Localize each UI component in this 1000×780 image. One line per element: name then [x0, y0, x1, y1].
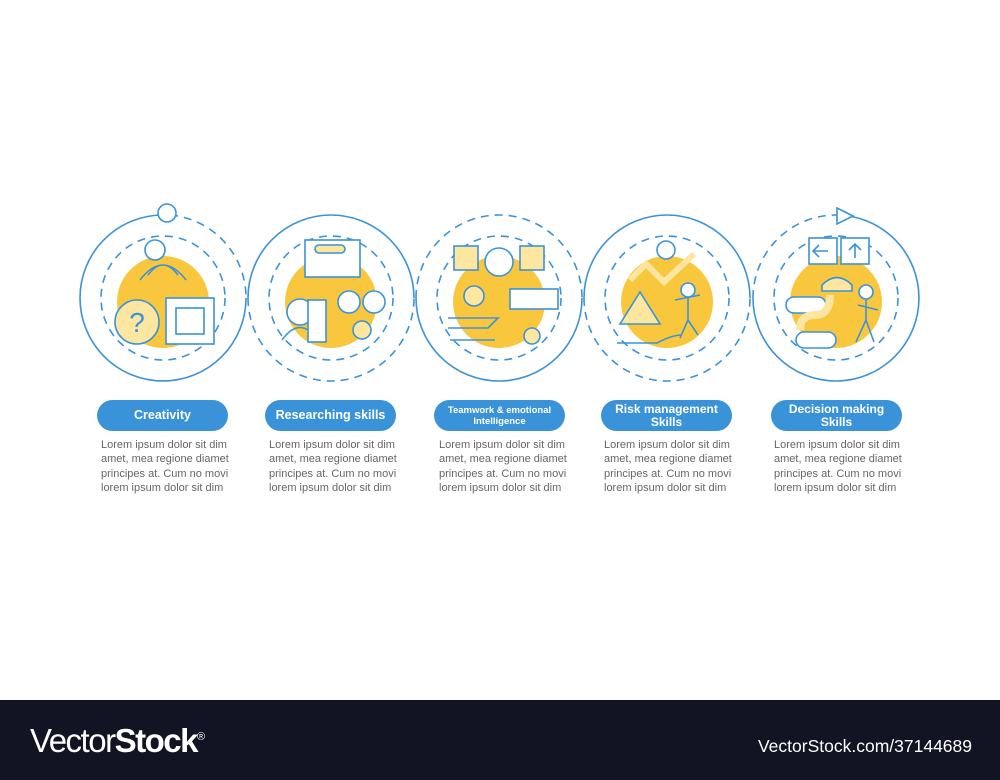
circle 5: decision: [753, 208, 919, 381]
text: creativity: Lorem ipsum dolor sit dim amet, mea regione diamet principes at. Cum no movi lorem ipsum dolor sit dim: [101, 439, 229, 494]
pill: Risk management: Skills: [651, 414, 682, 428]
logo: VectorStock®: [30, 722, 204, 759]
pill: Teamwork: Teamwork & emotional: [448, 404, 551, 416]
text: teamwork: Lorem ipsum dolor sit dim amet, mea regione diamet principes at. Cum no movi lorem ipsum dolor sit dim: [439, 439, 567, 494]
circle 4: risk: [584, 215, 750, 381]
circle 2: research: [248, 215, 414, 381]
pill: Researching skills: Researching skills: [276, 408, 385, 422]
circle 1: creativity: ?: [129, 307, 145, 338]
text: researching: Lorem ipsum dolor sit dim amet, mea regione diamet principes at. Cum no movi lorem ipsum dolor sit dim: [269, 439, 397, 494]
pill: Teamwork: [434, 400, 565, 431]
pill: Decision making: Skills: [821, 414, 852, 428]
circle 1: creativity: [80, 204, 246, 381]
pill: Risk management: [601, 400, 732, 431]
url: VectorStock.com/37144689: [758, 736, 972, 756]
pill: Risk management: Risk management: [615, 402, 718, 416]
diagram circles: [79, 203, 920, 382]
pill: Researching skills: [265, 400, 396, 431]
pill: Decision making: Decision making: [789, 402, 884, 416]
text: decision: Lorem ipsum dolor sit dim amet, mea regione diamet principes at. Cum no movi lorem ipsum dolor sit dim: [774, 439, 902, 494]
pill: Decision making: [771, 400, 902, 431]
pill: Creativity: [97, 400, 228, 431]
text: risk: Lorem ipsum dolor sit dim amet, mea regione diamet principes at. Cum no movi lorem ipsum dolor sit dim: [604, 439, 732, 494]
pill: Creativity: Creativity: [134, 408, 191, 422]
footer bar: [0, 700, 1000, 780]
circle 3: teamwork: [416, 215, 582, 381]
pill: Teamwork: Intelligence: [473, 416, 526, 426]
